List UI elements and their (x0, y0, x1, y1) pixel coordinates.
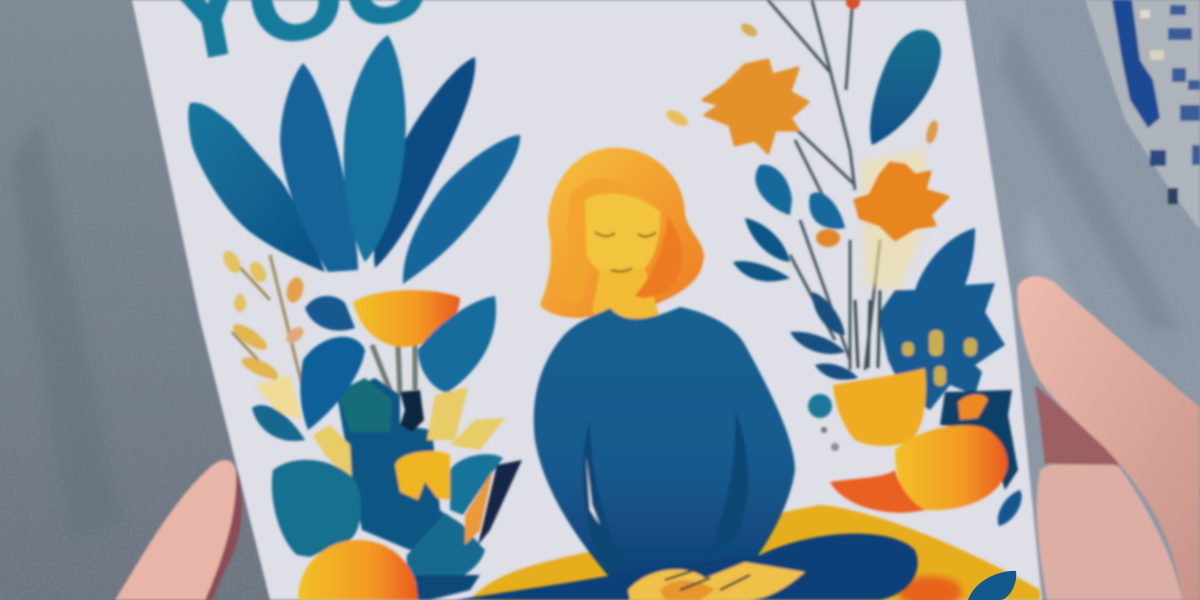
orange flower lower (855, 163, 948, 240)
orange flower top (703, 60, 808, 153)
yellow orange cup flower (395, 451, 450, 500)
blue seed leaf (998, 490, 1022, 526)
black accent (400, 390, 424, 432)
teal leaf right (450, 454, 503, 515)
teal inner foliage (336, 376, 446, 552)
big teal leaf bottom left (272, 460, 361, 557)
background: grey denim right (950, 0, 1200, 600)
orange strip (465, 470, 493, 545)
hair orange sweep (570, 179, 653, 300)
bottom left orange fruit (298, 540, 418, 600)
blue leaf right (418, 296, 496, 393)
yellow pot (833, 368, 926, 446)
green-teal fronds (337, 378, 392, 432)
pale stems (372, 345, 415, 395)
small dark leaf (305, 296, 355, 331)
left plant (188, 35, 522, 600)
hands on lap (628, 562, 805, 600)
soft yellow halo (862, 150, 925, 290)
neck (592, 268, 660, 325)
teal leaf lower right (407, 513, 485, 587)
thumb shadow (205, 470, 242, 600)
person (455, 148, 918, 600)
big fruit (895, 425, 1008, 510)
blue star foliage (878, 228, 1005, 410)
hand orange shading (660, 581, 715, 600)
sweater arm shading (582, 414, 748, 548)
finger lines (665, 570, 750, 590)
mat orange patch (898, 576, 962, 600)
background: blue checked fabric (1085, 0, 1200, 230)
book cover (132, 0, 1042, 600)
large blue leaves (188, 35, 520, 284)
dark foliage behind fruit (940, 390, 1018, 490)
red bud (846, 0, 860, 9)
hair back (540, 148, 704, 318)
closed eyes and mouth (595, 232, 656, 272)
teal small leaf (252, 405, 305, 441)
blue leaf left (300, 337, 365, 430)
meditation mat (470, 505, 1040, 600)
yellow fern (220, 248, 307, 420)
petal small right (924, 119, 940, 145)
right hand (1017, 276, 1200, 600)
face (584, 193, 662, 272)
hair orange right (635, 215, 683, 298)
left hand (115, 460, 242, 600)
orange bud (816, 229, 840, 247)
small blue leaves (733, 165, 858, 418)
small dark foliage under fruit (415, 575, 480, 600)
shadow between fingers (1035, 385, 1130, 465)
sweater body (534, 307, 795, 590)
orange wedge (830, 470, 925, 513)
right plant (664, 0, 1022, 526)
stems (768, 0, 880, 370)
pale stems over white (855, 290, 880, 368)
sweater inner gaps (586, 455, 600, 525)
dark tip (478, 460, 522, 545)
floating petals (739, 21, 759, 39)
lower finger (1037, 458, 1182, 600)
petal left (664, 107, 690, 129)
small fruit bud (958, 394, 988, 420)
crossed legs (455, 534, 918, 600)
yellow centre fronds (313, 387, 505, 482)
dots (831, 443, 839, 451)
background: grey denim left (0, 0, 300, 600)
yellow orange tulip flower (353, 290, 460, 347)
upper finger (1017, 276, 1200, 600)
tall blue leaf (870, 30, 941, 145)
mat blue leaf (968, 571, 1016, 600)
yellow buds in foliage (902, 330, 977, 386)
